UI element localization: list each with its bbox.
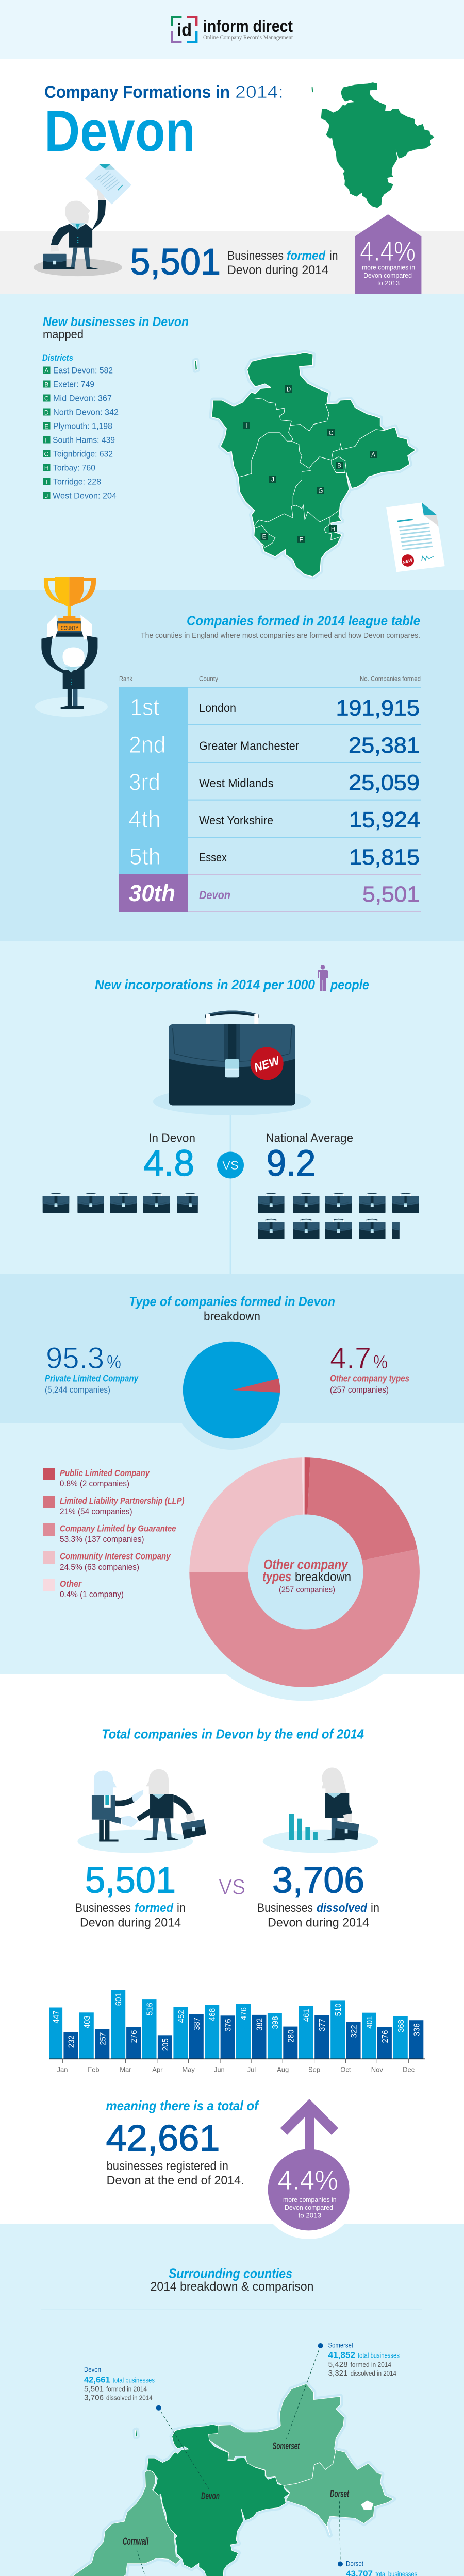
- donut chart: other company types: breakdown: [295, 1570, 351, 1584]
- districts legend: [42, 353, 119, 501]
- legend: company types: Limited Liability Partnership (LLP): [60, 1496, 185, 1506]
- map: Devon districts: F: [299, 537, 303, 543]
- heading: breakdown: [204, 1310, 260, 1324]
- comparison: formed vs dissolved: Businesses: [257, 1901, 313, 1915]
- league table rows: Devon: [199, 888, 230, 902]
- bar chart: monthly formed and dissolved: 601: [114, 1993, 123, 2006]
- districts legend: Torbay: 760: [53, 464, 95, 473]
- bar chart: monthly formed and dissolved: Aug: [277, 2066, 289, 2074]
- map: Devon districts: A: [371, 452, 375, 459]
- pictogram: 9.2 briefcases: [258, 1193, 419, 1239]
- league table rows: 1st: [130, 694, 159, 720]
- stat: 95.3% private limited: 95.3: [46, 1342, 104, 1375]
- callout: arrow and 4.4% growth circle: Devon compared: [285, 2204, 333, 2211]
- donut chart: other company types: [176, 1443, 434, 1701]
- comparison: formed vs dissolved: in: [371, 1901, 379, 1915]
- illustration: man holding county trophy: [35, 577, 108, 717]
- callout: 4.4% more companies: to 2013: [377, 279, 400, 287]
- bar chart: monthly formed and dissolved: 322: [350, 2025, 359, 2038]
- panel: surrounding counties: [0, 2224, 464, 2576]
- bar chart: monthly formed and dissolved: [49, 1990, 425, 2074]
- heading: Type of companies formed in Devon: [129, 1294, 335, 1309]
- title: [44, 82, 284, 163]
- stat: 5,501 businesses formed: [130, 242, 338, 283]
- stat: 5,501 businesses formed: in: [329, 249, 338, 263]
- legend: company types: 24.5% (63 companies): [60, 1562, 139, 1572]
- bar chart: monthly formed and dissolved: 403: [83, 2015, 92, 2028]
- comparison: formed vs dissolved: in: [177, 1901, 186, 1915]
- bar chart: monthly formed and dissolved: 257: [98, 2032, 107, 2045]
- callout: Devon: 3,706: [84, 2394, 104, 2402]
- heading: The counties in England where most companies are formed and how Devon compares.: [141, 632, 420, 640]
- callout: Somerset: 3,321: [328, 2369, 347, 2378]
- districts legend: Districts: [42, 353, 73, 363]
- league table rows: West Midlands: [199, 776, 273, 790]
- callout: arrow and 4.4% growth circle: [259, 2099, 358, 2239]
- districts legend: I: [46, 478, 47, 485]
- bar chart: monthly formed and dissolved: 516: [145, 2003, 155, 2015]
- callout: Somerset: 41,852: [328, 2350, 355, 2360]
- callout: 4.4% more companies: [355, 214, 421, 294]
- logo: inform direct: [171, 16, 293, 43]
- hero panel: company formations in Devon: [0, 59, 464, 294]
- callout: arrow and 4.4% growth circle: 4.4%: [277, 2165, 338, 2196]
- stat: 42,661 total businesses: 42,661: [106, 2119, 220, 2159]
- districts legend: Exeter: 749: [53, 380, 94, 389]
- bar chart: monthly formed and dissolved: 382: [256, 2018, 264, 2031]
- league table rows: 15,815: [349, 845, 420, 870]
- map: Devon districts: B: [337, 463, 341, 469]
- illustration: businessman holding document: [34, 164, 131, 276]
- callout: Dorset: [346, 2560, 417, 2576]
- league table rows: Greater Manchester: [199, 739, 299, 752]
- districts legend: E: [44, 422, 48, 430]
- callout: Dorset: Dorset: [346, 2560, 363, 2568]
- panel: new incorporations per 1000 people: [0, 941, 464, 1274]
- callout: 4.4% more companies: more companies in: [362, 264, 415, 272]
- legend: company types: 0.8% (2 companies): [60, 1479, 129, 1488]
- callout: Somerset: [328, 2341, 400, 2378]
- map: Devon districts: D: [287, 386, 291, 393]
- legend: company types: 21% (54 companies): [60, 1506, 132, 1516]
- legend: company types: Company Limited by Guarantee: [60, 1523, 176, 1533]
- league table rows: Essex: [199, 851, 227, 864]
- callout: Devon: dissolved in 2014: [106, 2394, 153, 2402]
- logo: inform direct: id: [177, 20, 192, 40]
- stat: 4.7% other company types: %: [373, 1351, 388, 1372]
- league table rows: [119, 687, 421, 912]
- comparison: formed vs dissolved: Businesses: [75, 1901, 131, 1915]
- bar chart: monthly formed and dissolved: Mar: [120, 2066, 131, 2074]
- bar chart: monthly formed and dissolved: Oct: [340, 2066, 351, 2074]
- panel: type of companies formed: [0, 1274, 464, 1450]
- districts legend: C: [44, 395, 49, 402]
- stat: 4.7% other company types: (257 companies): [330, 1385, 389, 1395]
- comparison: formed vs dissolved: dissolved: [317, 1901, 368, 1915]
- map: Devon districts: I: [245, 423, 247, 430]
- map: Devon districts: H: [331, 527, 335, 533]
- title: 2014:: [235, 82, 284, 102]
- callout: Somerset: total businesses: [358, 2351, 400, 2360]
- heading: New businesses in Devon: [43, 315, 189, 329]
- stat: 5,501 businesses formed: formed: [287, 249, 326, 263]
- table header: County: [199, 676, 218, 683]
- callout: 4.4% more companies: Devon compared: [363, 272, 412, 279]
- callout: Somerset: dissolved in 2014: [351, 2369, 396, 2377]
- legend: company types: 0.4% (1 company): [60, 1589, 124, 1599]
- comparison: In Devon vs National Average: National Average: [266, 1131, 353, 1145]
- heading: [43, 315, 189, 342]
- map: Devon districts: [195, 352, 416, 577]
- bar chart: monthly formed and dissolved: 398: [271, 2016, 280, 2029]
- stat: 95.3% private limited: %: [107, 1351, 121, 1372]
- comparison: In Devon vs National Average: 4.8: [143, 1143, 194, 1184]
- heading: Total companies in Devon by the end of 2014: [102, 1726, 364, 1742]
- donut chart: other company types: types: [262, 1569, 291, 1584]
- bar chart: monthly formed and dissolved: Apr: [152, 2066, 163, 2074]
- map: south west counties: Dorset: [330, 2488, 349, 2499]
- legend: company types: Public Limited Company: [60, 1468, 150, 1478]
- callout: 4.4% more companies: 4.4%: [360, 236, 416, 267]
- legend: company types: 53.3% (137 companies): [60, 1534, 144, 1544]
- callout: Devon: 5,501: [84, 2385, 104, 2394]
- league table rows: 4th: [128, 806, 161, 833]
- stat: 5,501 businesses formed: Businesses: [227, 249, 284, 263]
- bar chart: monthly formed and dissolved: 205: [161, 2038, 170, 2051]
- bar chart: monthly formed and dissolved: Jul: [247, 2066, 256, 2074]
- legend: company types: Other: [60, 1579, 82, 1589]
- panel: other company types breakdown: [0, 1423, 464, 1701]
- league table rows: West Yorkshire: [199, 814, 273, 827]
- bar chart: monthly formed and dissolved: Jan: [57, 2066, 68, 2074]
- districts legend: West Devon: 204: [53, 492, 117, 501]
- league table rows: 3rd: [129, 769, 160, 795]
- bar chart: monthly formed and dissolved: 461: [303, 2009, 311, 2022]
- comparison: formed vs dissolved: 3,706: [272, 1860, 364, 1901]
- comparison: formed vs dissolved: 5,501: [85, 1860, 176, 1901]
- heading with person icon: [95, 965, 369, 992]
- callout: Somerset: 5,428: [328, 2360, 347, 2369]
- stat: 5,501 businesses formed: 5,501: [130, 242, 221, 283]
- pie chart: private vs other: [172, 1330, 291, 1450]
- stat: 95.3% private limited: (5,244 companies): [45, 1385, 110, 1395]
- comparison: In Devon vs National Average: VS: [222, 1159, 239, 1173]
- map: south west counties: Somerset: [273, 2441, 300, 2452]
- table header: No. Companies formed: [360, 676, 421, 683]
- map: south west counties: [45, 2343, 393, 2576]
- league table rows: 191,915: [336, 696, 420, 721]
- heading: Surrounding counties: [169, 2265, 292, 2281]
- bar chart: monthly formed and dissolved: 468: [208, 2008, 217, 2021]
- bar chart: monthly formed and dissolved: Nov: [371, 2066, 383, 2074]
- stat: 4.7% other company types: Other company types: [330, 1373, 409, 1384]
- bar chart: monthly formed and dissolved: 232: [67, 2035, 76, 2048]
- heading with person icon: people: [330, 977, 369, 992]
- bar chart: monthly formed and dissolved: 387: [193, 2018, 202, 2030]
- stat: 42,661 total businesses: meaning there is a total of: [106, 2098, 259, 2113]
- callout: Devon: Devon: [84, 2366, 101, 2374]
- heading: [129, 1294, 335, 1324]
- bar chart: monthly formed and dissolved: Sep: [308, 2066, 320, 2074]
- callout: Devon: 42,661: [84, 2375, 110, 2384]
- league table rows: 15,924: [349, 808, 420, 833]
- districts legend: A: [44, 367, 48, 374]
- panel: new businesses mapped: [0, 294, 464, 590]
- league table rows: 30th: [129, 880, 175, 906]
- districts legend: G: [44, 450, 49, 457]
- bar chart: monthly formed and dissolved: 447: [52, 2010, 61, 2024]
- heading: Companies formed in 2014 league table: [187, 613, 420, 629]
- logo: inform direct: inform direct: [203, 16, 293, 36]
- callout: Devon: [84, 2366, 155, 2402]
- stat: 95.3% private limited: Private Limited Company: [45, 1373, 139, 1384]
- illustration: man holding county trophy: COUNTY: [61, 625, 78, 632]
- illustration: businessmen shaking hands: [77, 1769, 206, 1853]
- comparison: formed vs dissolved: formed: [135, 1901, 174, 1915]
- districts legend: B: [44, 381, 48, 388]
- districts legend: South Hams: 439: [53, 436, 115, 445]
- callout: arrow and 4.4% growth circle: more companies in: [283, 2196, 337, 2204]
- icon: new company document: [386, 502, 445, 572]
- districts legend: J: [45, 493, 48, 500]
- title: Company Formations in: [44, 82, 230, 102]
- districts legend: H: [44, 465, 49, 472]
- donut chart: other company types: (257 companies): [279, 1586, 335, 1595]
- heading with person icon: New incorporations in 2014 per 1000: [95, 977, 316, 992]
- legend: company types: Community Interest Company: [60, 1551, 171, 1561]
- comparison: In Devon vs National Average: [143, 1131, 353, 1184]
- stat: 4.7% other company types: [330, 1342, 409, 1395]
- callout: Somerset: Somerset: [328, 2341, 353, 2349]
- icon: new company document: NEW: [402, 557, 414, 565]
- stat: 42,661 total businesses: businesses registered in: [107, 2159, 228, 2173]
- icon: large briefcase with new sticker: NEW: [252, 1053, 282, 1074]
- bar chart: monthly formed and dissolved: 336: [412, 2023, 421, 2036]
- bar chart: monthly formed and dissolved: 452: [177, 2010, 186, 2023]
- map: south west counties: Devon: [201, 2491, 220, 2502]
- bar chart: monthly formed and dissolved: Jun: [214, 2066, 225, 2074]
- comparison: formed vs dissolved: Devon during 2014: [268, 1916, 369, 1930]
- icon: large briefcase with new sticker: [153, 1010, 311, 1115]
- stat: 5,501 businesses formed: Devon during 2014: [227, 263, 328, 277]
- comparison: formed vs dissolved: VS: [219, 1875, 245, 1899]
- districts legend: East Devon: 582: [53, 366, 113, 375]
- league table rows: 5,501: [362, 882, 420, 907]
- bar chart: monthly formed and dissolved: Feb: [88, 2066, 100, 2074]
- bar chart: monthly formed and dissolved: 376: [224, 2019, 233, 2031]
- districts legend: F: [45, 437, 48, 444]
- stat: 42,661 total businesses: [106, 2098, 259, 2188]
- map: Devon districts: J: [271, 477, 274, 483]
- districts legend: North Devon: 342: [53, 408, 119, 417]
- bar chart: monthly formed and dissolved: May: [182, 2066, 195, 2074]
- stat: 42,661 total businesses: Devon at the end of 2014.: [107, 2174, 244, 2188]
- comparison: formed vs dissolved: Devon during 2014: [80, 1916, 181, 1930]
- bar chart: monthly formed and dissolved: 510: [334, 2003, 343, 2016]
- illustration: businessman with falling chart: [263, 1768, 378, 1853]
- comparison: In Devon vs National Average: In Devon: [148, 1131, 195, 1145]
- comparison: In Devon vs National Average: 9.2: [267, 1143, 316, 1184]
- panel: total companies at end of 2014: [0, 1674, 464, 2239]
- districts legend: Mid Devon: 367: [53, 394, 112, 403]
- bar chart: monthly formed and dissolved: 368: [397, 2020, 406, 2032]
- callout: Somerset: formed in 2014: [351, 2361, 391, 2368]
- callout: arrow and 4.4% growth circle: to 2013: [299, 2211, 321, 2219]
- map: Devon districts: G: [319, 488, 323, 495]
- heading: [151, 2265, 313, 2294]
- heading: mapped: [43, 328, 84, 342]
- league table rows: 25,059: [349, 771, 420, 795]
- districts legend: Plymouth: 1,198: [53, 421, 112, 431]
- map: Devon silhouette: [312, 82, 435, 208]
- map: Devon districts: C: [329, 431, 333, 437]
- heading: [141, 613, 420, 640]
- map: Devon districts: E: [262, 534, 267, 540]
- callout: Devon: total businesses: [113, 2376, 155, 2384]
- districts legend: Torridge: 228: [53, 477, 101, 486]
- legend: company types: [43, 1468, 185, 1599]
- header band with logo: [0, 0, 464, 59]
- league table rows: London: [199, 701, 236, 715]
- bar chart: monthly formed and dissolved: 401: [366, 2016, 374, 2029]
- bar chart: monthly formed and dissolved: 377: [318, 2019, 327, 2031]
- pictogram: 4.8 briefcases: [43, 1193, 204, 1213]
- bar chart: monthly formed and dissolved: Dec: [403, 2066, 415, 2074]
- table header: [119, 676, 421, 683]
- comparison: formed vs dissolved: [75, 1860, 379, 1930]
- bar chart: monthly formed and dissolved: 276: [130, 2030, 139, 2043]
- panel: companies formed league table: [0, 577, 464, 941]
- table header: Rank: [119, 676, 132, 683]
- stat: 4.7% other company types: 4.7: [330, 1342, 371, 1375]
- bar chart: monthly formed and dissolved: 280: [287, 2030, 295, 2043]
- league table rows: 2nd: [129, 732, 166, 758]
- districts legend: D: [44, 409, 49, 416]
- donut chart: other company types: Other company: [263, 1557, 349, 1572]
- title: Devon: [44, 99, 195, 163]
- league table rows: 25,381: [349, 733, 420, 758]
- districts legend: Teignbridge: 632: [53, 449, 113, 459]
- heading: 2014 breakdown & comparison: [151, 2280, 313, 2294]
- bar chart: monthly formed and dissolved: 476: [240, 2007, 248, 2020]
- league table rows: 5th: [129, 843, 161, 870]
- logo: inform direct: Online Company Records Management: [203, 35, 293, 41]
- map: south west counties: Cornwall: [123, 2536, 148, 2547]
- callout: Devon: formed in 2014: [106, 2385, 147, 2393]
- stat: 95.3% private limited: [45, 1342, 139, 1395]
- bar chart: monthly formed and dissolved: 276: [381, 2030, 390, 2043]
